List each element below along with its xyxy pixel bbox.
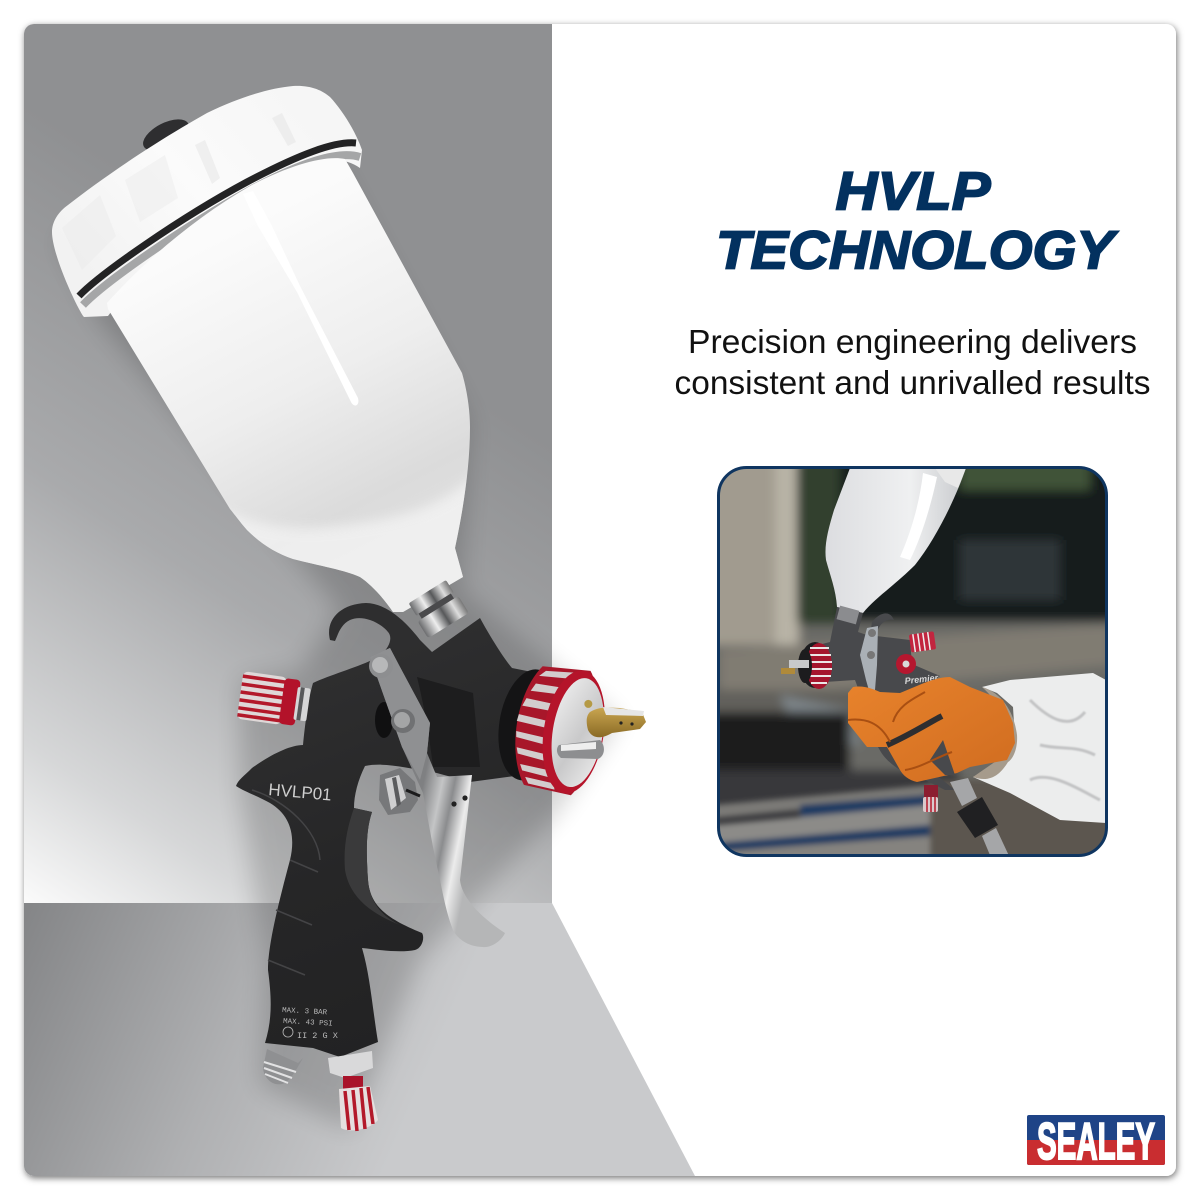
air cap face — [544, 674, 611, 791]
rear fluid knob — [237, 671, 312, 728]
grip contour lines — [252, 790, 320, 975]
photo bottom knob — [924, 785, 938, 799]
photo background — [720, 469, 1105, 830]
pressure rating marking — [282, 1007, 338, 1041]
photo gun — [818, 607, 955, 790]
pressure rating marking: MAX. 43 PSI — [283, 1018, 333, 1029]
air valve fitting — [379, 768, 420, 815]
trigger lever — [370, 648, 505, 947]
front ring and air cap — [490, 658, 613, 799]
photo gun label: Premier — [904, 672, 939, 686]
heading: TECHNOLOGY — [716, 220, 1119, 280]
paint cup lid — [52, 86, 362, 317]
paint cup lid knob — [138, 113, 194, 157]
heading: HVLP — [836, 162, 992, 222]
trigger pivot bolts — [369, 654, 393, 678]
gun body — [236, 603, 532, 1057]
subheading text — [674, 323, 1150, 401]
lower lid lip — [83, 155, 360, 305]
product: HVLP spray gun — [52, 86, 646, 1131]
lid facets — [62, 155, 178, 270]
photo front ring — [804, 642, 820, 688]
barrel side plate — [417, 677, 480, 767]
cup lower light band — [234, 481, 466, 612]
cup highlight — [243, 191, 358, 405]
grip front lit face — [345, 808, 400, 925]
cup collar fitting — [407, 579, 469, 638]
subheading text: Precision engineering delivers — [688, 323, 1137, 360]
pressure rating marking: MAX. 3 BAR — [282, 1007, 328, 1017]
photo red dial — [896, 654, 916, 674]
trigger upper link shade — [370, 648, 430, 780]
paint cup body — [107, 158, 470, 612]
spray nozzle tip — [587, 708, 646, 737]
photo: gun in gloved hand — [717, 466, 1108, 857]
pressure rating marking: II 2 G X — [297, 1031, 338, 1041]
panel: product backdrop — [24, 24, 695, 1176]
air inlet fitting — [263, 1049, 303, 1084]
heading — [716, 162, 1119, 280]
photo rear knob — [909, 631, 936, 653]
ring knurling — [507, 665, 578, 790]
glove finger creases — [848, 692, 952, 770]
photo orange glove — [848, 677, 1015, 782]
model label: HVLP01 — [268, 780, 332, 805]
subheading text: consistent and unrivalled results — [674, 364, 1150, 401]
photo drawers — [720, 778, 1105, 854]
air cap horn — [557, 740, 604, 759]
photo gun cup fitting — [837, 606, 859, 624]
photo cuff — [973, 687, 1017, 779]
photo gun grip strap — [887, 716, 942, 745]
photo trigger lever — [860, 626, 878, 690]
photo frame — [718, 468, 1106, 856]
lid sealing ring — [79, 143, 356, 296]
bottom adjuster knob — [328, 1051, 378, 1131]
photo paint cup — [825, 468, 966, 613]
photo hose connector — [950, 778, 977, 806]
photo sleeve — [973, 673, 1106, 823]
